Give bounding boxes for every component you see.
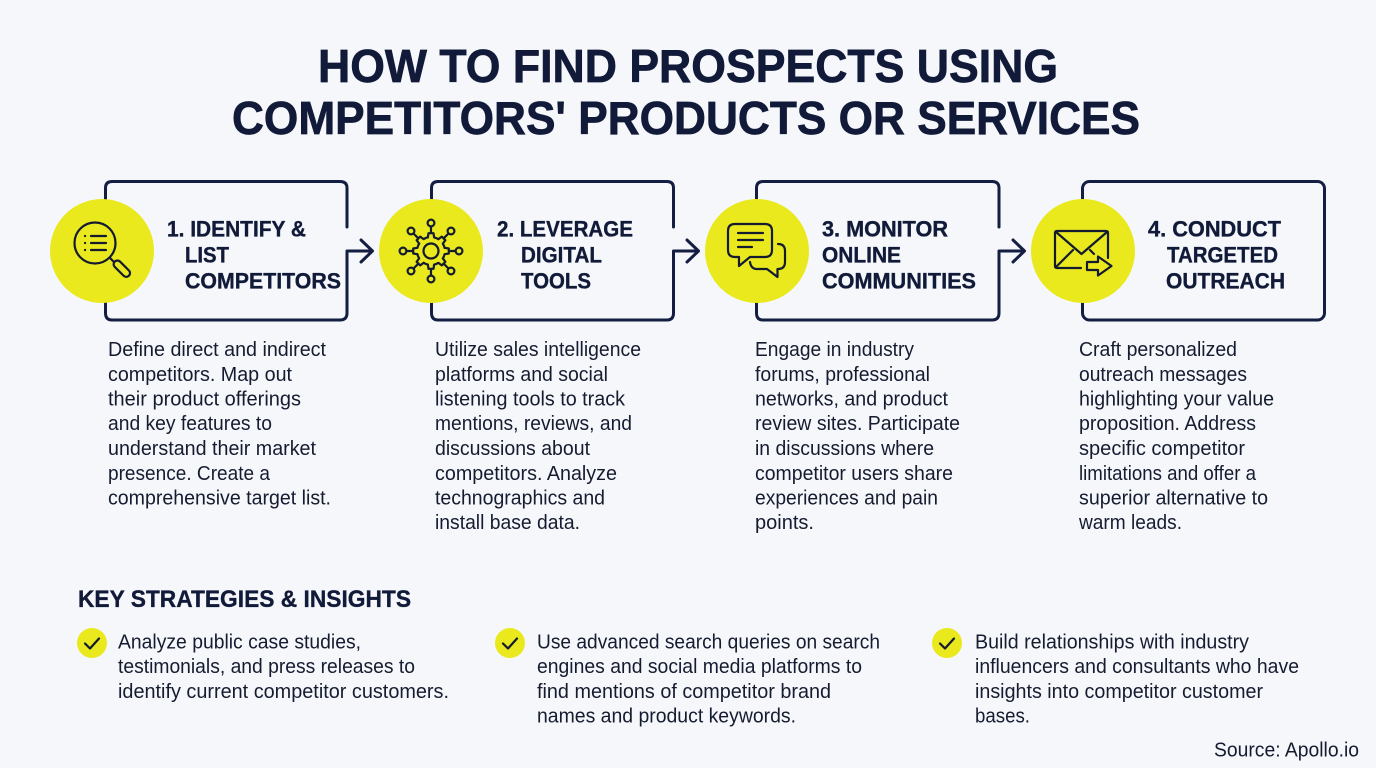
insight 2 — [495, 628, 880, 728]
step 2 heading: TOOLS — [521, 268, 591, 294]
step 2 description: mentions, reviews, and — [435, 413, 632, 435]
step 1 description: comprehensive target list. — [108, 488, 331, 510]
insight 1 text: identify current competitor customers. — [118, 681, 449, 703]
icon: envelope with arrow — [1055, 231, 1112, 276]
step 2 description: discussions about — [435, 438, 590, 460]
title: COMPETITORS' PRODUCTS OR SERVICES — [232, 92, 1140, 144]
insight 3 — [932, 628, 1299, 728]
insight 1 text: testimonials, and press releases to — [118, 656, 415, 678]
insight 2 text: find mentions of competitor brand — [537, 681, 831, 703]
step 4 heading: TARGETED — [1167, 242, 1278, 268]
step 3 description: review sites. Participate — [755, 413, 960, 435]
step 1 heading: 1. IDENTIFY & — [167, 216, 306, 242]
step 1 heading: LIST — [185, 242, 230, 268]
step 2 description — [435, 339, 641, 534]
step 4 description: Craft personalized — [1079, 339, 1237, 361]
step 2 description: install base data. — [435, 512, 580, 534]
step 3 description — [755, 339, 960, 534]
step 3 icon circle — [705, 199, 809, 303]
step 4 frame — [1082, 182, 1324, 320]
step 4 description: limitations and offer a — [1079, 463, 1257, 485]
insight 1 — [77, 628, 449, 703]
step 1 description: and key features to — [108, 413, 272, 435]
panel: step 1 — [50, 182, 372, 510]
icon: magnifying glass with list — [74, 222, 132, 278]
step 4 description: specific competitor — [1079, 438, 1245, 460]
panel: step 3 — [705, 182, 1024, 534]
insight 3 text: influencers and consultants who have — [975, 656, 1299, 678]
step 3 frame and arrow — [756, 182, 1024, 320]
step 1 heading: COMPETITORS — [185, 268, 341, 294]
step 2 frame and arrow — [432, 182, 698, 320]
step 1 description: their product offerings — [108, 388, 301, 410]
step 1 description: presence. Create a — [108, 463, 271, 485]
insight 1 text — [118, 632, 449, 703]
step 3 heading — [822, 216, 976, 294]
step 1 description: competitors. Map out — [108, 364, 292, 386]
step 1 heading — [167, 216, 341, 294]
step 4 description: outreach messages — [1079, 364, 1247, 386]
icon: check 2 — [495, 628, 525, 658]
step 1 description: understand their market — [108, 438, 316, 460]
step 4 icon circle — [1031, 199, 1135, 303]
step 1 description: Define direct and indirect — [108, 339, 326, 361]
step 3 description: points. — [755, 512, 814, 534]
step 2 description: competitors. Analyze — [435, 463, 617, 485]
title: HOW TO FIND PROSPECTS USING — [318, 40, 1058, 92]
step 3 description: networks, and product — [755, 388, 948, 410]
step 4 description: superior alternative to — [1079, 488, 1268, 510]
step 3 heading: ONLINE — [822, 242, 901, 268]
insight 1 text: Analyze public case studies, — [118, 632, 361, 654]
heading: key strategies: KEY STRATEGIES & INSIGHTS — [78, 586, 411, 613]
step 4 description: warm leads. — [1078, 512, 1182, 534]
step 2 heading: DIGITAL — [521, 242, 602, 268]
step 3 description: experiences and pain — [755, 488, 938, 510]
step 3 description: Engage in industry — [755, 339, 914, 361]
step 4 heading — [1148, 216, 1285, 294]
insight 3 text: insights into competitor customer — [975, 681, 1263, 703]
title — [232, 40, 1140, 144]
panel: step 2 — [379, 182, 698, 534]
step 4 heading: 4. CONDUCT — [1148, 216, 1282, 242]
icon: check 1 — [77, 628, 107, 658]
icon: gear network — [400, 220, 462, 282]
insight 2 text: engines and social media platforms to — [537, 656, 862, 678]
step 2 description: platforms and social — [435, 364, 608, 386]
step 2 description: Utilize sales intelligence — [435, 339, 641, 361]
insight 2 text: Use advanced search queries on search — [537, 632, 880, 654]
step 4 description — [1078, 339, 1274, 534]
insight 2 text — [537, 632, 880, 728]
insight 3 text — [975, 632, 1299, 728]
step 3 description: forums, professional — [755, 364, 930, 386]
step 1 description — [108, 339, 331, 510]
step 4 heading: OUTREACH — [1166, 268, 1285, 294]
step 2 description: listening tools to track — [435, 388, 626, 410]
step 3 heading: 3. MONITOR — [822, 216, 948, 242]
step 4 description: proposition. Address — [1079, 413, 1256, 435]
insight 3 text: bases. — [975, 706, 1030, 728]
source credit: Source: Apollo.io — [1214, 740, 1359, 762]
icon: chat bubbles — [728, 224, 785, 277]
step 1 frame and arrow — [106, 182, 372, 320]
insight 2 text: names and product keywords. — [537, 706, 796, 728]
step 4 description: highlighting your value — [1079, 388, 1274, 410]
step 2 heading: 2. LEVERAGE — [497, 216, 633, 242]
step 3 description: competitor users share — [755, 463, 953, 485]
step 3 description: in discussions where — [755, 438, 934, 460]
step 2 icon circle — [379, 199, 483, 303]
icon: check 3 — [932, 628, 962, 658]
panel: step 4 — [1031, 182, 1324, 534]
step 2 heading — [497, 216, 633, 294]
step 2 description: technographics and — [435, 488, 605, 510]
step 3 heading: COMMUNITIES — [822, 268, 976, 294]
insight 3 text: Build relationships with industry — [975, 632, 1249, 654]
step 1 icon circle — [50, 199, 154, 303]
